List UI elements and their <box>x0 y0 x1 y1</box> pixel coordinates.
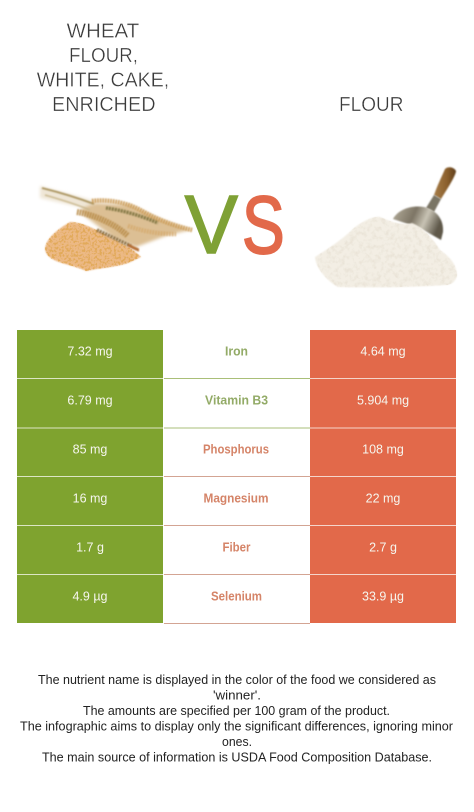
row: Fiber <box>76 540 397 554</box>
wheat stem haze <box>40 186 95 210</box>
heading: Wheat flour, white, cake, enriched: WHEAT <box>67 20 139 42</box>
row: Vitamin B3 <box>67 394 409 408</box>
column: wheat flour values <box>17 330 163 623</box>
column: flour values <box>310 330 456 623</box>
row: Magnesium: Magnesium <box>204 492 268 506</box>
row dividers <box>17 378 456 624</box>
scoop neck <box>426 195 441 212</box>
row: Phosphorus <box>73 442 404 456</box>
row: Phosphorus: Phosphorus <box>203 442 269 456</box>
row: Magnesium: 16 mg <box>73 492 107 506</box>
row: Fiber: 2.7 g <box>369 540 397 554</box>
row: Magnesium: 22 mg <box>366 492 400 506</box>
row: Iron: Iron <box>225 344 248 358</box>
flour pile <box>315 217 457 287</box>
comparison table <box>17 330 456 624</box>
row: Selenium: Selenium <box>211 590 262 604</box>
icon: wheat grains and stalks <box>40 186 192 271</box>
footnote text: The nutrient name is displayed in the color of the food we considered as <box>38 672 436 687</box>
row: Phosphorus: 85 mg <box>73 442 107 456</box>
footnote text: The infographic aims to display only the significant differences, ignoring minor <box>20 718 454 734</box>
grain pile <box>45 222 141 271</box>
scoop bowl <box>393 207 443 240</box>
heading: Wheat flour, white, cake, enriched: ENRICHED <box>52 94 156 116</box>
VS <box>185 178 285 272</box>
row: Fiber: 1.7 g <box>76 540 104 554</box>
row: Iron: 7.32 mg <box>67 344 113 358</box>
footnote text: 'winner'. <box>213 688 261 702</box>
heading: Wheat flour, white, cake, enriched: FLOUR, <box>69 45 138 67</box>
wheat ear mass <box>80 203 190 247</box>
letter V: V <box>185 179 238 272</box>
scoop handle <box>434 167 456 199</box>
footnote text: The main source of information is USDA Food Composition Database. <box>42 750 432 764</box>
footnote text: The amounts are specified per 100 gram of the product. <box>83 703 390 718</box>
row: Phosphorus: 108 mg <box>362 442 404 456</box>
wheat stalks <box>42 188 192 250</box>
row: Vitamin B3: Vitamin B3 <box>205 394 268 408</box>
row: Magnesium <box>73 492 400 506</box>
heading: Wheat flour, white, cake, enriched <box>37 20 169 116</box>
row: Selenium <box>72 590 404 604</box>
row: Iron: 4.64 mg <box>360 344 406 358</box>
icon: flour pile with scoop <box>315 167 457 287</box>
footnote text <box>20 672 454 764</box>
row: Iron <box>67 344 406 358</box>
row: Fiber: Fiber <box>222 540 251 554</box>
row: Selenium: 4.9 µg <box>72 590 108 604</box>
letter S: S <box>242 178 285 271</box>
row: Vitamin B3: 6.79 mg <box>67 394 113 408</box>
footnote text: ones. <box>222 734 252 749</box>
row: Selenium: 33.9 µg <box>362 590 404 604</box>
heading: Wheat flour, white, cake, enriched: WHITE, CAKE, <box>37 70 169 92</box>
heading: Flour: FLOUR <box>339 94 404 116</box>
row: Vitamin B3: 5.904 mg <box>357 394 409 408</box>
